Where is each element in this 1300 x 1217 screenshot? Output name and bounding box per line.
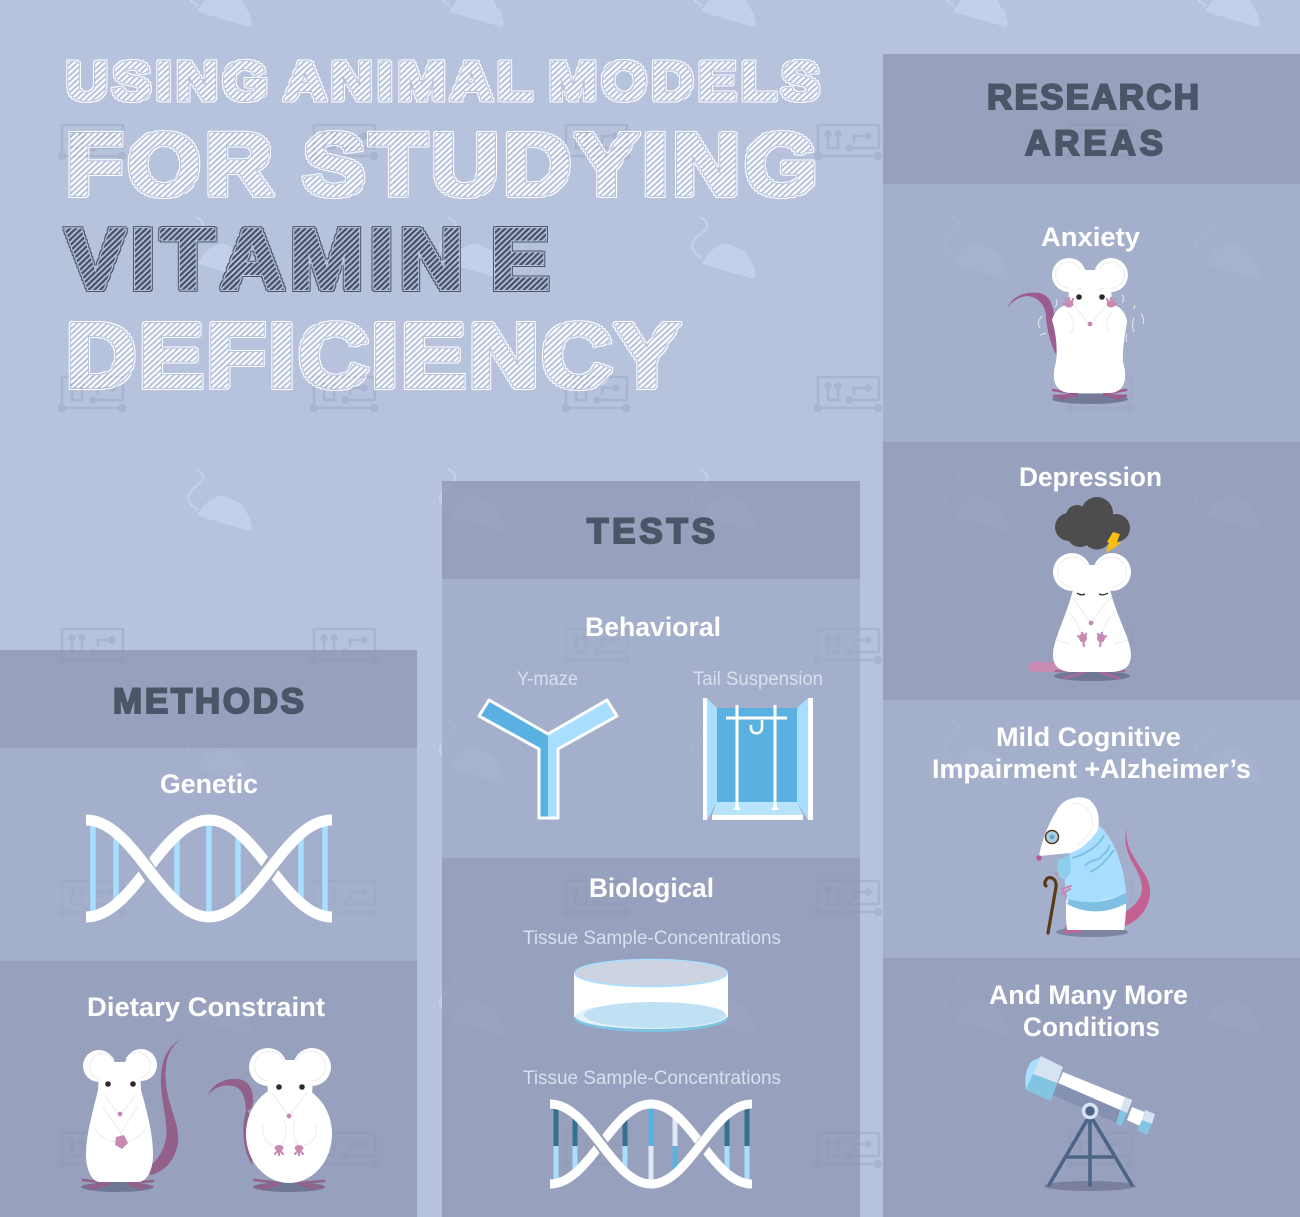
icon: depressed mouse with storm cloud bbox=[1028, 497, 1131, 681]
heading: methods: METHODS bbox=[113, 682, 304, 721]
title: FOR STUDYING bbox=[66, 117, 818, 214]
icon: coloured DNA helix bbox=[550, 1104, 752, 1184]
icon: anxious mouse bbox=[1007, 258, 1144, 404]
panel: research areas bbox=[883, 54, 1300, 1217]
label: and many more conditions: And Many More bbox=[989, 980, 1188, 1010]
label: anxiety: Anxiety bbox=[1041, 222, 1140, 252]
label: tissue sample 1: Tissue Sample-Concentrations bbox=[523, 928, 781, 949]
icon: DNA helix bbox=[86, 820, 332, 917]
label: biological: Biological bbox=[589, 873, 714, 903]
heading: research areas: AREAS bbox=[1025, 124, 1163, 163]
panel: tests bbox=[442, 481, 860, 1217]
label: tissue sample 2: Tissue Sample-Concentrations bbox=[523, 1068, 781, 1089]
heading: research areas bbox=[987, 78, 1199, 163]
panel: methods bbox=[0, 650, 417, 1217]
label: mild cognitive impairment: Mild Cognitive bbox=[996, 722, 1181, 752]
label: mild cognitive impairment bbox=[932, 722, 1251, 784]
title: USING ANIMAL MODELS bbox=[66, 50, 820, 111]
label: behavioral: Behavioral bbox=[585, 612, 721, 642]
icon: storm cloud bbox=[1055, 497, 1130, 553]
icon: y-maze bbox=[479, 700, 617, 818]
heading: research areas: RESEARCH bbox=[987, 78, 1199, 117]
title: DEFICIENCY bbox=[66, 305, 679, 406]
icon: petri dish bbox=[574, 960, 728, 1032]
icon: telescope bbox=[1025, 1056, 1155, 1191]
icon: tail suspension chamber bbox=[703, 698, 813, 820]
icon: elderly mouse with cane bbox=[1036, 797, 1150, 937]
title: VITAMIN E bbox=[66, 213, 550, 307]
title bbox=[66, 50, 820, 406]
icon: thin mouse bbox=[81, 1038, 183, 1192]
label: mild cognitive impairment: Impairment +Alzheimer’s bbox=[932, 754, 1251, 784]
icon: plump mouse bbox=[208, 1048, 332, 1192]
label: tail suspension: Tail Suspension bbox=[693, 669, 823, 690]
label: dietary constraint: Dietary Constraint bbox=[87, 992, 325, 1022]
heading: tests: TESTS bbox=[587, 512, 715, 551]
label: depression: Depression bbox=[1019, 462, 1162, 492]
label: and many more conditions: Conditions bbox=[1023, 1012, 1160, 1042]
label: genetic: Genetic bbox=[160, 769, 258, 799]
label: y-maze: Y-maze bbox=[517, 669, 578, 690]
label: and many more conditions bbox=[989, 980, 1188, 1042]
